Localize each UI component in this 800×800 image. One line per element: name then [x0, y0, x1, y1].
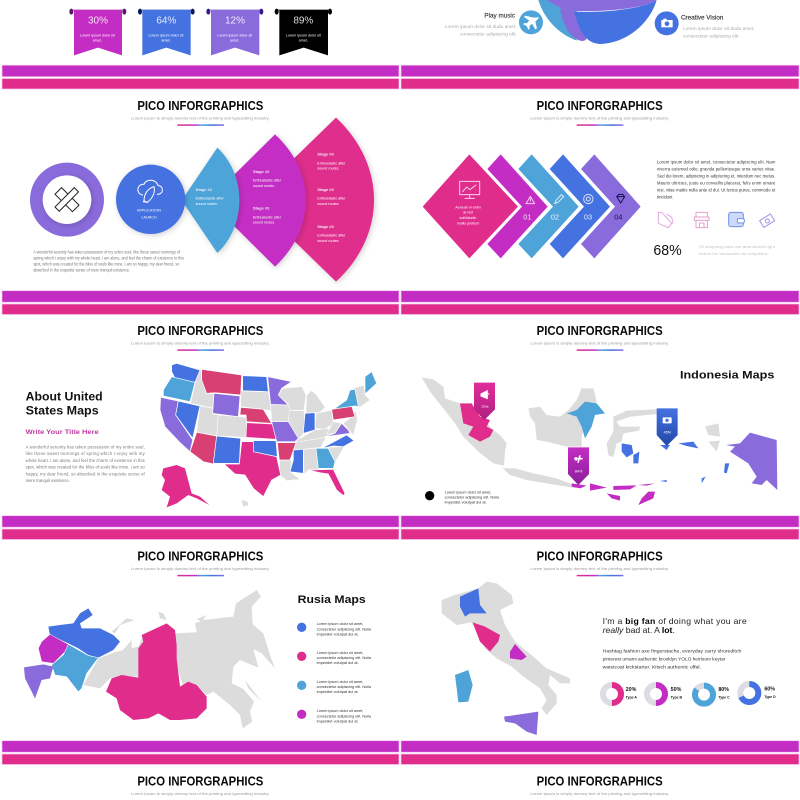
ribbon 12%: 12%: [225, 16, 245, 27]
icon: money: [760, 214, 775, 227]
paragraph: pinterest umami authentic brooklyn YOLO heirloom keytar: [603, 656, 726, 661]
heading row 3 right: PICO INFORGRAPHICS: [537, 324, 663, 338]
stage labels blue: Stage #1: [196, 187, 213, 192]
map: USA: [160, 363, 377, 507]
paragraph: spot, which was created for the bliss of souls like mine. I am so happy, my dear friend, so: [33, 261, 180, 266]
map: Russia: [24, 590, 275, 728]
chevron magenta: [487, 154, 548, 258]
heading: [26, 389, 103, 417]
legend item 1: consectetur adipiscing elit. Nulla: [317, 626, 372, 631]
label 04: 04: [614, 213, 622, 222]
heading: I'm a big fan of doing what you are: [603, 616, 747, 626]
stat caption: before the transaction its completed.: [699, 251, 768, 256]
purple ring with tools icon: [30, 163, 104, 237]
map: Indonesia: [422, 377, 777, 505]
divider bands row 1: [2, 65, 799, 89]
heading: Rusia Maps: [298, 594, 366, 606]
ribbon 64%: Lorem ipsum dolor sit: [149, 34, 183, 38]
stage labels pink: sound routes.: [317, 202, 339, 206]
legend item 4: Lorem ipsum dolor sit amet,: [317, 708, 363, 713]
heading row 3 left: PICO INFORGRAPHICS: [137, 324, 263, 338]
label 01: 01: [523, 213, 531, 222]
stage labels magenta: sound routes.: [253, 221, 275, 225]
stage labels blue: [196, 187, 224, 206]
ribbon 30%: 30%: [88, 16, 108, 27]
legend item 1: [297, 621, 372, 636]
donut type A: [603, 685, 637, 703]
icon: store: [694, 212, 709, 228]
pin blue 45%: 45%: [664, 431, 672, 435]
stage labels pink: sound routes.: [317, 167, 339, 171]
icon: wallet: [729, 212, 744, 227]
legend item 3: [297, 679, 372, 694]
heading row 2 right: PICO INFORGRAPHICS: [537, 99, 663, 113]
heading row 4 left: PICO INFORGRAPHICS: [137, 549, 263, 563]
heading: States Maps: [26, 403, 99, 417]
divider bands row 3: [2, 516, 799, 540]
panel: Italy: [442, 582, 776, 735]
donut type B: Type B: [671, 696, 683, 700]
heading row 5 left: PICO INFORGRAPHICS: [137, 774, 263, 788]
stage labels pink: Stage #3: [317, 224, 335, 229]
diamond pink: Aenean in enim: [455, 205, 481, 209]
paragraph: nisi, vitae mattis nulla ante id dui. Ut lectus purus, commodo et: [657, 188, 776, 193]
paragraph: A wonderful serenity has taken possession of my entire soul, like these sweet mornings of: [33, 249, 181, 254]
stage labels magenta: sound routes.: [253, 184, 275, 188]
paragraph: Lorem ipsum dolor sit amet, consectetur adipiscing elit. Nam: [657, 159, 776, 164]
paragraph: spring which I enjoy with my whole heart. I am alone, and feel the charm of existence in this: [33, 255, 184, 260]
stat 68%: 68%: [653, 243, 682, 259]
stage labels magenta: Enthusiastic after: [253, 179, 282, 183]
donut type C: 80%: [718, 687, 729, 693]
panel: ribbons: [69, 9, 332, 55]
paragraph: [26, 444, 146, 483]
donut type A: 20%: [626, 687, 637, 693]
stage labels blue: sound routes.: [196, 202, 218, 206]
donut type D: Type D: [764, 695, 776, 699]
stage labels magenta: Enthusiastic after: [253, 215, 282, 219]
pin purple 84%: 84%: [575, 470, 583, 474]
heading row 2 right: Lorem Ipsum is simply dummy text of the printing and typesetting industry.: [530, 117, 669, 121]
paragraph: [33, 249, 184, 272]
heading row 4 right: [530, 549, 669, 576]
ribbon 30%: [69, 9, 126, 55]
stage labels pink: Enthusiastic after: [317, 197, 346, 201]
pin purple 84%: [568, 447, 589, 485]
diamond pink: at nisl: [463, 211, 473, 215]
heading row 5 right: Lorem Ipsum is simply dummy text of the printing and typesetting industry.: [530, 792, 669, 796]
stage labels magenta: Stage #2: [253, 206, 270, 211]
heading row 4 left: Lorem Ipsum is simply dummy text of the printing and typesetting industry.: [131, 567, 270, 571]
label 03: 03: [584, 213, 592, 222]
panel: chevrons: [423, 154, 776, 259]
text: play music: consectetur adipiscing elit.: [460, 32, 517, 38]
subtitle: Write Your Title Here: [26, 429, 99, 436]
donut type C: [695, 686, 730, 704]
paragraph: viverra euismod odio, gravida pellentesque urna varius vitae.: [657, 167, 775, 172]
legend item 2: [297, 650, 372, 665]
paragraph: [657, 159, 776, 200]
panel: sphere callouts: [445, 0, 755, 44]
application launch circle: APPLICATION: [137, 209, 161, 213]
ribbon 64%: [138, 9, 195, 55]
stat caption: [699, 244, 776, 256]
panel: stages: [30, 118, 374, 282]
text: creative vision: consectetur adipiscing elit.: [683, 34, 740, 40]
heading row 5 left: Lorem Ipsum is simply dummy text of the printing and typesetting industry.: [131, 792, 270, 796]
legend item 3: Lorem ipsum dolor sit amet,: [317, 679, 363, 684]
icon: plane: [519, 10, 543, 34]
stage labels pink: Enthusiastic after: [317, 161, 346, 165]
label 02: 02: [551, 213, 559, 222]
paragraph: Sed dui lorem, adipiscing in adipiscing et, interdum nec metus.: [657, 174, 775, 179]
pin magenta 72%: [474, 383, 495, 420]
stage labels magenta: [253, 169, 282, 225]
map: Italy: [442, 582, 570, 735]
donut type D: 60%: [764, 686, 775, 692]
diamond pink: sollicitudin: [460, 216, 476, 220]
heading row 3 left: [131, 324, 270, 351]
ribbon 12%: Lorem ipsum dolor sit: [217, 34, 252, 38]
heading row 4 left: [131, 549, 270, 576]
stage labels blue: Enthusiastic after: [196, 197, 224, 201]
heading row 3 left: Lorem Ipsum is simply dummy text of the printing and typesetting industry.: [131, 342, 270, 346]
stage labels pink: Stage #3: [317, 187, 335, 192]
legend item 1: Lorem ipsum dolor sit amet,: [317, 621, 363, 626]
legend item 3: consectetur adipiscing elit. Nulla: [317, 684, 372, 689]
stage labels magenta: Stage #2: [253, 169, 270, 174]
heading row 5 right: PICO INFORGRAPHICS: [537, 774, 663, 788]
icon: speaker: [658, 212, 673, 228]
ribbon 30%: Lorem ipsum dolor sit: [80, 34, 115, 38]
donut type B: [647, 685, 683, 703]
legend item 4: imperdiet volutpat dui at.: [317, 718, 359, 723]
heading row 2 left: PICO INFORGRAPHICS: [137, 99, 263, 113]
stage labels pink: sound routes.: [317, 239, 339, 243]
paragraph: Mauris ultricies, justo eu convallis placerat, felis enim ornare: [657, 181, 776, 186]
legend: imperdiet volutpat dui at.: [445, 500, 487, 505]
heading row 3 right: Lorem Ipsum is simply dummy text of the printing and typesetting industry.: [530, 342, 669, 346]
sphere: [538, 0, 657, 44]
text: play music: [445, 12, 517, 38]
divider bands row 2: [2, 291, 799, 314]
heading: About United: [26, 389, 103, 403]
icon: camera: [655, 11, 679, 35]
heading row 5 right: [530, 774, 669, 796]
heading row 2 right: [530, 99, 669, 126]
label 03: [584, 194, 593, 222]
ribbon 89%: [275, 9, 332, 55]
text: play music: Lorem ipsum dolor sit dudu amet,: [445, 24, 517, 30]
panel: Russia: [24, 590, 372, 728]
heading: really bad at. A lot.: [603, 625, 675, 635]
ribbon 89%: Lorem ipsum dolor sit: [286, 34, 321, 38]
legend: Lorem ipsum dolor sit amet,: [445, 489, 491, 494]
stage labels pink: [317, 152, 346, 243]
ribbon 30%: amet,: [93, 38, 102, 42]
stage lens blue: [182, 148, 239, 253]
legend item 2: consectetur adipiscing elit. Nulla: [317, 655, 372, 660]
paragraph: tincidunt: [657, 195, 673, 200]
panel: USA: [26, 363, 377, 507]
donut type A: Type A: [626, 696, 637, 700]
paragraph: mere tranquil existence.: [26, 478, 70, 483]
heading row 2 left: [131, 99, 270, 126]
legend: [425, 489, 500, 505]
heading row 4 right: PICO INFORGRAPHICS: [537, 549, 663, 563]
pin magenta 72%: 72%: [481, 405, 489, 409]
donut type B: 50%: [671, 687, 682, 693]
heading row 4 right: Lorem Ipsum is simply dummy text of the printing and typesetting industry.: [530, 567, 669, 571]
donut type C: Type C: [718, 696, 730, 700]
legend item 1: imperdiet volutpat dui at.: [317, 631, 359, 636]
paragraph: A wonderful serenity has taken possession of my entire soul,: [26, 444, 145, 449]
ribbon 89%: amet,: [299, 38, 308, 42]
pin blue 45%: [657, 408, 678, 446]
chevron purple: [581, 154, 641, 258]
text: creative vision: Creative Vision: [681, 15, 724, 22]
stage labels pink: Stage #3: [317, 152, 335, 157]
legend item 2: Lorem ipsum dolor sit amet,: [317, 650, 363, 655]
heading row 3 right: [530, 324, 669, 351]
stage labels pink: Enthusiastic after: [317, 234, 346, 238]
label 01: [523, 196, 535, 222]
divider bands row 4: [2, 741, 799, 764]
paragraph: waistcoat kickstarter. Kitsch authentic offal.: [603, 665, 701, 670]
legend item 2: imperdiet volutpat dui at.: [317, 660, 359, 665]
chevron blue: [550, 154, 610, 258]
stage lens pink: [252, 118, 374, 282]
donut type D: [740, 684, 776, 702]
legend item 4: consectetur adipiscing elit. Nulla: [317, 713, 372, 718]
paragraph: spot, which was created for the bliss of souls like mine. I am so: [26, 465, 145, 470]
paragraph: happy, my dear friend, so absorbed in the exquisite sense of: [26, 472, 146, 477]
application launch circle: LAUNCH: [141, 215, 157, 219]
application launch circle: [116, 165, 185, 234]
ribbon 64%: amet,: [161, 38, 171, 42]
diamond pink: mollis pretium: [457, 221, 479, 225]
stage lens magenta: [208, 134, 306, 267]
paragraph: like these sweet mornings of spring which I enjoy with my: [26, 451, 146, 456]
label 04: [614, 194, 625, 222]
text: play music: Play music: [484, 12, 515, 19]
text: creative vision: Lorem ipsum dolor sit dudu amet,: [683, 26, 755, 32]
ribbon 89%: 89%: [293, 16, 313, 27]
legend: consectetur adipiscing elit. Nulla: [445, 494, 500, 499]
label 02: [551, 195, 564, 222]
paragraph: [603, 648, 742, 670]
ribbon 12%: amet,: [230, 38, 239, 42]
paragraph: whole heart. I am alone, and feel the charm of existence in this: [26, 458, 145, 463]
panel: Indonesia: [422, 369, 777, 505]
ribbon 12%: [206, 9, 263, 55]
ribbon 64%: 64%: [156, 16, 176, 27]
heading: [603, 616, 747, 635]
paragraph: absorbed in the exquisite sense of mere tranquil existence.: [33, 267, 130, 272]
heading row 5 left: [131, 774, 270, 796]
text: creative vision: [681, 15, 755, 40]
legend item 4: [297, 708, 372, 723]
heading: Indonesia Maps: [680, 369, 774, 381]
heading row 2 left: Lorem Ipsum is simply dummy text of the printing and typesetting industry.: [131, 117, 270, 121]
paragraph: Hashtag fashion axe fingerstache, everyday carry shoreditch: [603, 648, 742, 653]
chevron light blue: [518, 154, 579, 258]
stat caption: Of shopping carts are abandoned right: [699, 244, 776, 249]
legend item 3: imperdiet volutpat dui at.: [317, 689, 359, 694]
diamond pink: [423, 154, 518, 258]
